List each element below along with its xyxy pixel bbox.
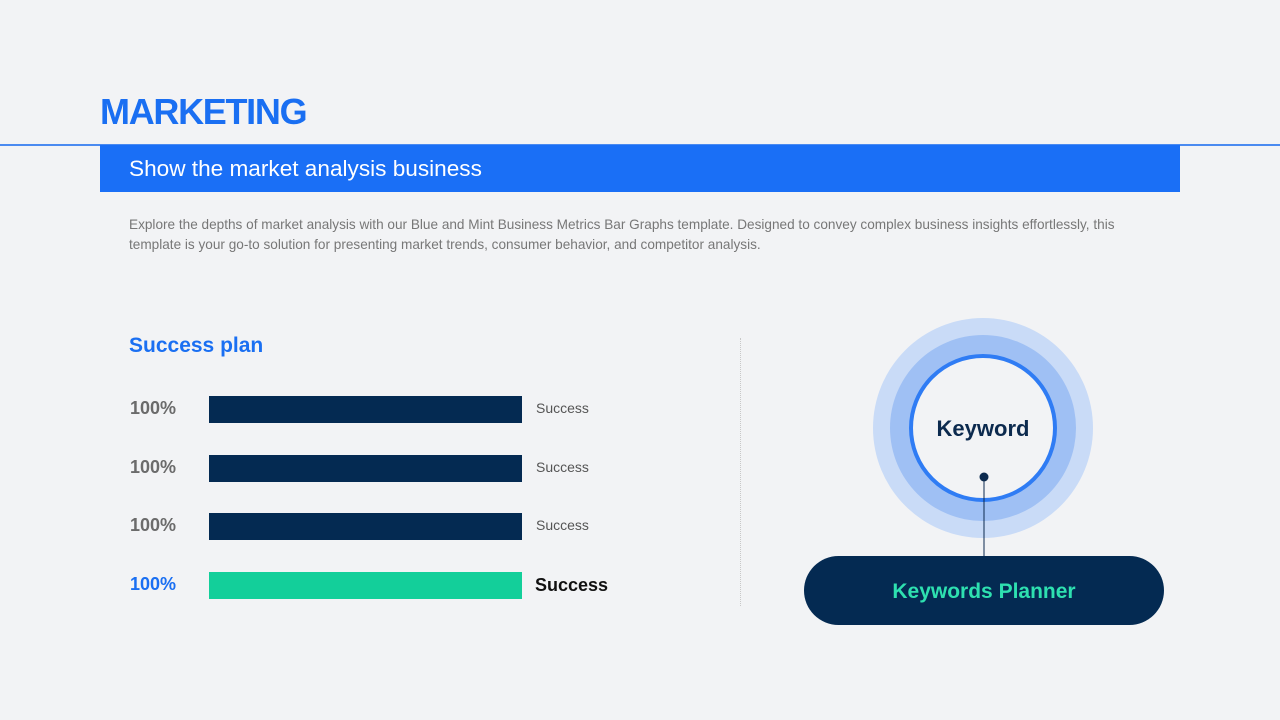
keyword circle diagram	[804, 318, 1164, 625]
bar chart: 100%	[130, 457, 176, 477]
description text: Explore the depths of market analysis with our Blue and Mint Business Metrics Bar Graphs template. Designed to convey complex business insights effortlessly, this template is your go-to solution for presenting market trends, consumer behavior, and competitor analysis.	[129, 217, 1115, 252]
bar row 3	[130, 513, 589, 540]
heading: success plan: Success plan	[129, 334, 263, 357]
bar chart: Success	[536, 400, 589, 416]
connector	[980, 472, 988, 558]
subtitle banner	[100, 145, 1180, 192]
bar chart: 100%	[130, 515, 176, 535]
pill: keywords planner	[804, 556, 1164, 625]
bar chart: 100%	[130, 398, 176, 418]
bar row 4 highlighted	[130, 572, 608, 599]
bar chart: Success	[536, 459, 589, 475]
subtitle banner: Show the market analysis business	[129, 156, 482, 181]
bar chart: Success	[536, 517, 589, 533]
title: MARKETING	[100, 91, 306, 132]
bar row 1	[130, 396, 589, 423]
bar chart: Success	[535, 575, 608, 595]
bar row 2	[130, 455, 589, 482]
bar chart	[130, 396, 608, 599]
keyword label: Keyword	[937, 416, 1029, 441]
bar chart: 100%	[130, 574, 176, 594]
pill: keywords planner: Keywords Planner	[892, 580, 1076, 603]
